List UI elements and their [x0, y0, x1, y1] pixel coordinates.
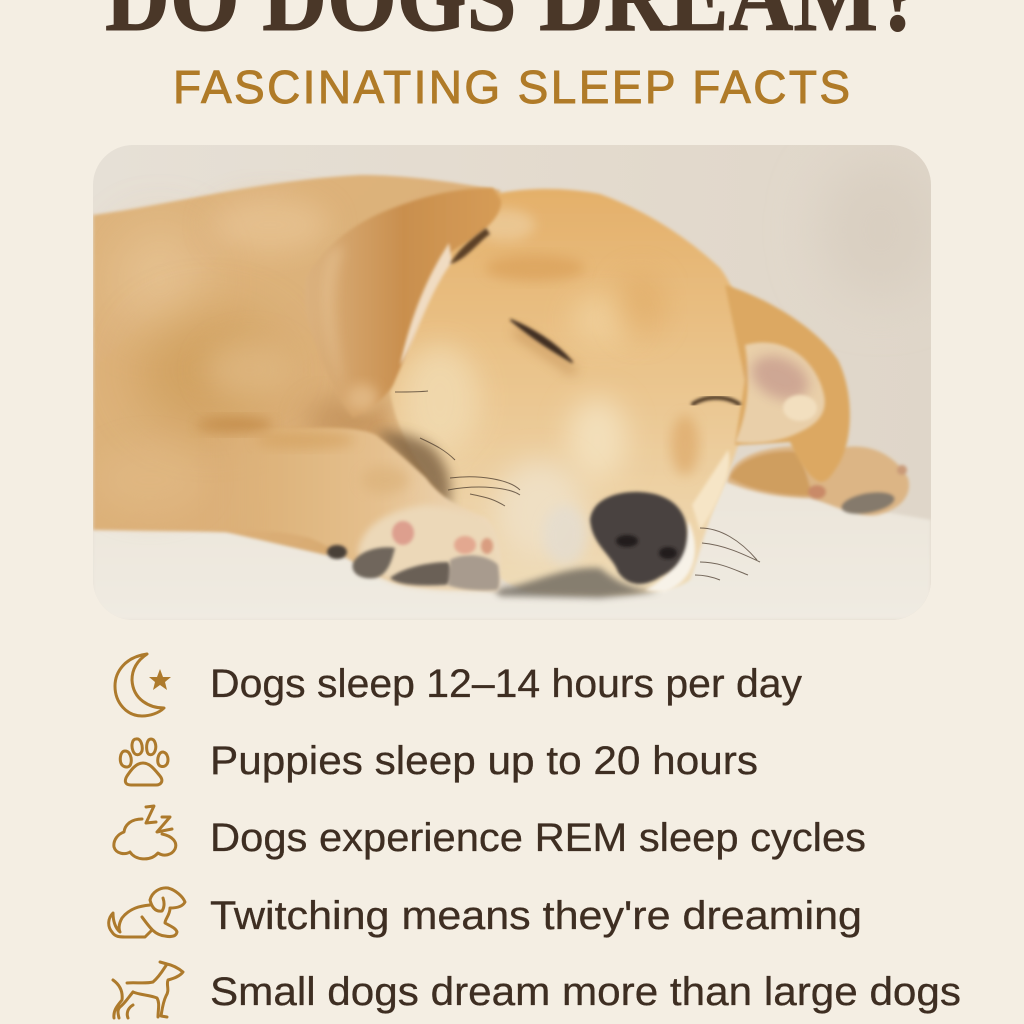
fact 4 text: Twitching means they're dreaming [210, 894, 862, 938]
head shading [400, 209, 729, 598]
photo: sleeping golden dog on a cream blanket [93, 145, 940, 620]
body shading [117, 196, 393, 436]
rear paw toe [808, 485, 826, 499]
rear paw pad [840, 490, 896, 516]
ear cup inner [735, 342, 825, 443]
fact 3 text: Dogs experience REM sleep cycles [210, 816, 866, 860]
elbow orange shadow [197, 417, 273, 433]
whitish lip [543, 505, 587, 565]
cheek light patch [400, 345, 480, 455]
neck crease shadow [376, 432, 450, 510]
left closed eye [511, 320, 572, 362]
icon: cloud with zzz [114, 806, 176, 859]
crescent moon [115, 654, 164, 716]
icon: lying dog [109, 888, 185, 937]
photo background wall [93, 145, 931, 620]
sleep z letters [146, 806, 172, 832]
rear paw [727, 446, 909, 518]
fact 5 text: Small dogs dream more than large dogs [210, 970, 961, 1014]
cloud [114, 819, 176, 859]
grey toe pad 2 [390, 562, 452, 585]
right closed eye [693, 398, 739, 404]
crown light patch [475, 209, 535, 241]
chest shadow [305, 398, 395, 442]
fact 3 row [114, 806, 866, 860]
lower body light [95, 445, 205, 515]
ear inner pale strip [400, 243, 452, 365]
ear fold light [783, 395, 817, 421]
nose shape [590, 492, 687, 584]
fact 2 row [120, 739, 758, 785]
rear paw tip [897, 465, 907, 475]
mid-face tan [616, 273, 664, 337]
snout blaze [567, 398, 627, 482]
nose [590, 492, 687, 584]
rear leg and paw shape [727, 446, 909, 515]
body shadow [135, 310, 285, 430]
body highlight [117, 230, 206, 326]
dark fur between paw and blanket [327, 545, 347, 559]
shoulder highlight [210, 197, 330, 253]
icon: standing dog [113, 962, 183, 1018]
mottled toe 3 [448, 555, 499, 590]
left whiskers [395, 391, 520, 506]
leg upper shadow [255, 431, 355, 449]
left muzzle cream [495, 460, 585, 560]
standing dog outline [127, 962, 183, 1017]
front leg [284, 427, 486, 590]
front paw [327, 505, 499, 590]
fact 1 row [115, 654, 802, 716]
blanket [93, 482, 931, 620]
paw pad [125, 763, 162, 785]
leg shading [197, 417, 409, 494]
rear leg shade [730, 451, 812, 496]
ear pink centre [744, 347, 816, 409]
grey toe pad 1 [353, 547, 395, 578]
pink toe 1 [392, 521, 414, 545]
right ear [725, 285, 850, 482]
wrist tan patch [361, 466, 409, 494]
whiskers [395, 391, 760, 580]
forehead shadow [485, 255, 585, 281]
fact 5 row [113, 962, 961, 1018]
right muzzle tan [671, 415, 699, 475]
standing dog tail and rear legs [113, 980, 133, 1018]
star [149, 669, 171, 690]
fact 2 text: Puppies sleep up to 20 hours [210, 739, 758, 783]
paw toes [120, 739, 168, 767]
left nostril [616, 535, 638, 547]
ear dark crease [450, 228, 490, 264]
brow light patch [570, 295, 640, 345]
right whiskers [695, 528, 760, 580]
left eye crease shadow [515, 330, 575, 372]
ear left rim light [321, 248, 343, 364]
paw cream shape [358, 505, 499, 590]
right nostril [659, 547, 677, 559]
fact 1 text: Dogs sleep 12–14 hours per day [210, 662, 802, 706]
white chin tip [645, 520, 695, 592]
head [390, 189, 750, 595]
subtitle: FASCINATING SLEEP FACTS [173, 61, 850, 113]
left ear [326, 186, 502, 416]
icon: moon and star [115, 654, 171, 716]
ear bottom tip highlight [346, 384, 378, 412]
fact 4 row [109, 888, 862, 938]
lying dog body and tail [109, 905, 152, 937]
lying dog head and ear [142, 888, 185, 937]
flank highlight [205, 340, 295, 400]
soft wall shade band [856, 200, 904, 260]
pink toe 3 [481, 538, 493, 554]
ear back [725, 285, 850, 482]
right muzzle cream [692, 450, 729, 530]
body [93, 175, 520, 555]
ear flap [333, 186, 502, 402]
jaw grey shadow [495, 568, 660, 598]
pink toe 2 [454, 536, 476, 554]
icon: paw print [120, 739, 168, 785]
